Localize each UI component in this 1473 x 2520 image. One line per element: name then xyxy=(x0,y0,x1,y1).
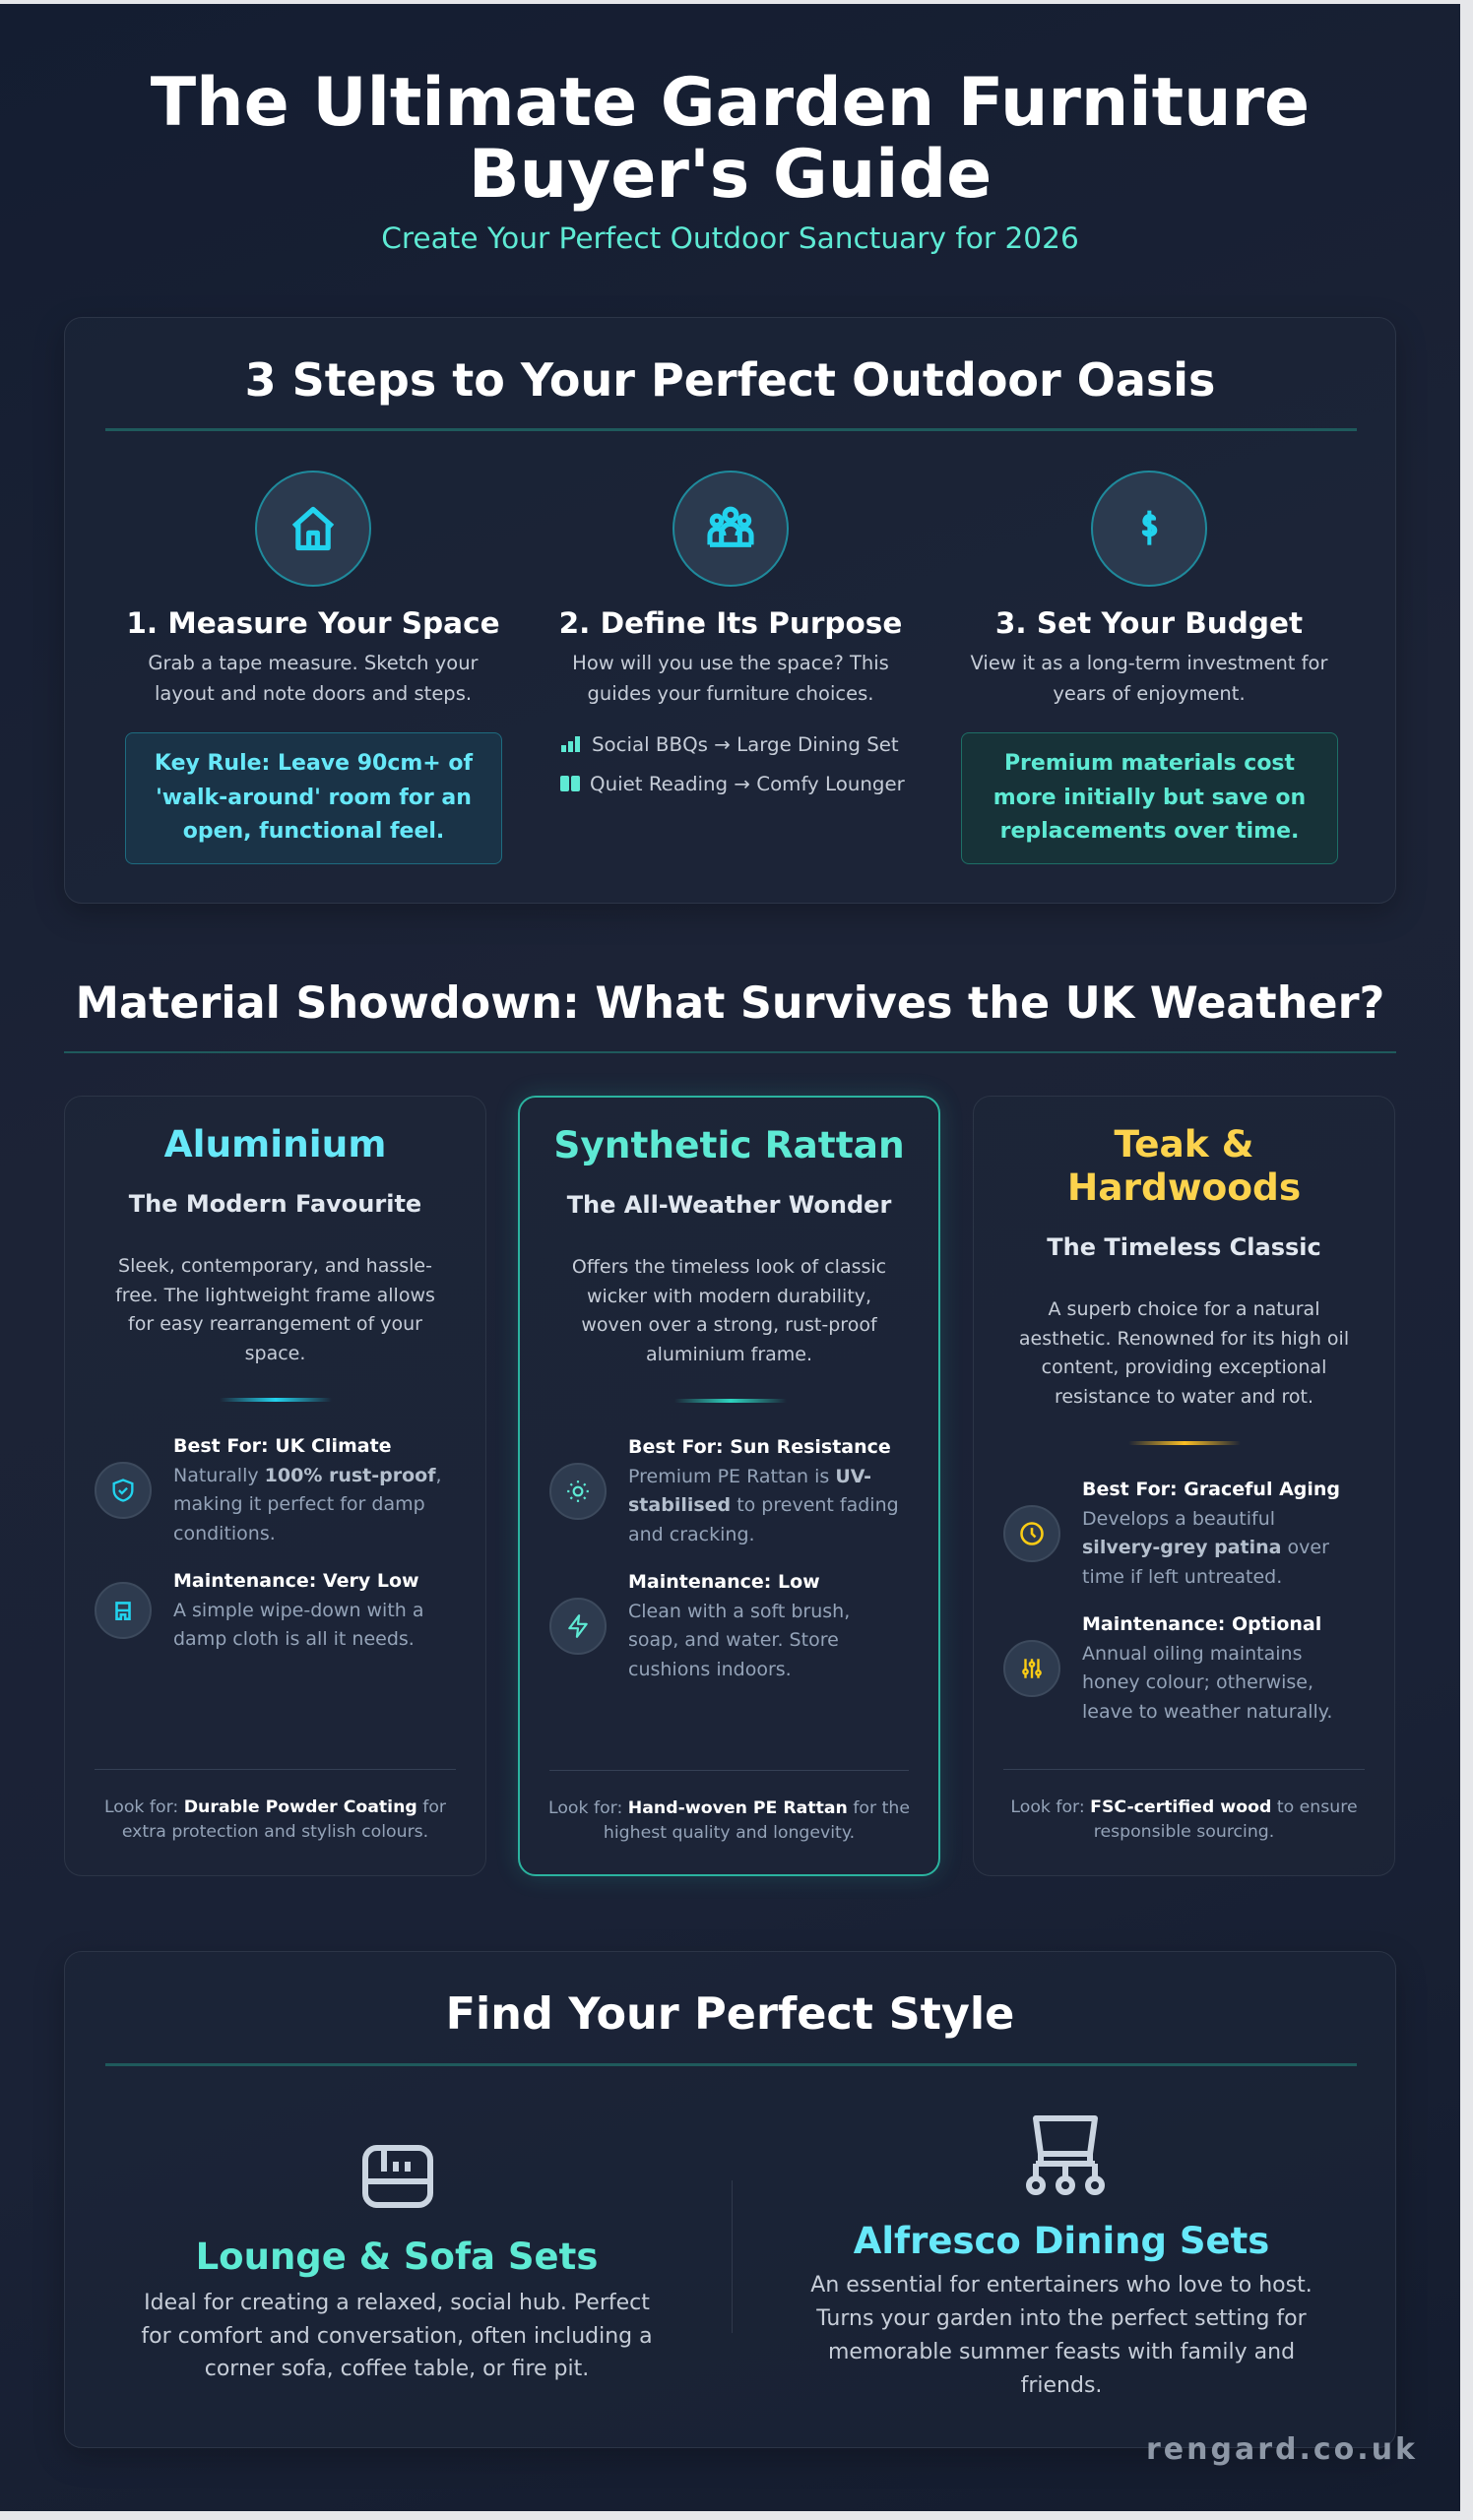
feature: best for xyxy=(549,1436,899,1545)
dining text: Alfresco Dining Sets xyxy=(854,2220,1269,2262)
step 1: layout and note doors and steps. xyxy=(155,682,472,705)
step 1: Grab a tape measure. Sketch your xyxy=(148,652,479,674)
feature: best for: Develops a beautiful xyxy=(1082,1508,1275,1530)
step 2: 2. Define Its Purpose xyxy=(559,606,902,640)
panel: synthetic rattan xyxy=(518,1096,940,1876)
purpose list: Quiet Reading → Comfy Lounger xyxy=(590,773,905,795)
icon: sofa xyxy=(362,2145,433,2208)
feature: best for: silvery-grey patina over time if left untreated. xyxy=(1082,1537,1329,1587)
watermark: rengard.co.uk xyxy=(1146,2432,1418,2467)
title: The Ultimate Garden Furniture xyxy=(151,64,1310,142)
panel: teak: A superb choice for a natural aesthetic. Renowned for its high oil content, providing exceptional resistance to water and rot. xyxy=(1019,1298,1349,1408)
lounge text: Ideal for creating a relaxed, social hub. Perfect xyxy=(144,2291,650,2315)
feature: maintenance xyxy=(549,1571,850,1679)
dining text: Turns your garden into the perfect setting for xyxy=(816,2306,1307,2331)
panel: aluminium: Sleek, contemporary, and hassle-free. The lightweight frame allows for easy rearrangement of your space. xyxy=(115,1255,435,1364)
panel: synthetic rattan: Offers the timeless look of classic wicker with modern durability, woven over a strong, rust-proof aluminium frame. xyxy=(572,1256,886,1364)
step 3: View it as a long-term investment for xyxy=(971,652,1327,674)
panel: aluminium: The Modern Favourite xyxy=(129,1190,421,1218)
dining text xyxy=(810,2220,1313,2398)
step 1: 1. Measure Your Space xyxy=(126,606,500,640)
feature: best for: Premium PE Rattan is UV-stabilised to prevent fading and cracking. xyxy=(628,1465,899,1545)
icon: money xyxy=(1091,471,1207,587)
dining text: friends. xyxy=(1021,2373,1102,2398)
step 3: years of enjoyment. xyxy=(1053,682,1246,705)
icon: house xyxy=(255,471,371,587)
heading: 3 steps: 3 Steps to Your Perfect Outdoor Oasis xyxy=(245,353,1215,407)
feature: maintenance: honey colour; otherwise, xyxy=(1082,1671,1313,1693)
title: Buyer's Guide xyxy=(469,136,992,214)
callout: premium: Premium materials cost more initially but save on replacements over time. xyxy=(993,751,1306,844)
step 2: guides your furniture choices. xyxy=(588,682,873,705)
purpose list: Social BBQs → Large Dining Set xyxy=(592,733,899,756)
feature: maintenance: Annual oiling maintains xyxy=(1082,1642,1302,1664)
feature: maintenance xyxy=(95,1570,424,1650)
lounge text xyxy=(141,2236,653,2381)
panel: teak: The Timeless Classic xyxy=(1047,1233,1321,1261)
dining text: memorable summer feasts with family and xyxy=(828,2340,1295,2364)
icon: dining xyxy=(1026,2115,1105,2195)
heading: material showdown: Material Showdown: What Survives the UK Weather? xyxy=(76,978,1384,1029)
divider vertical xyxy=(732,2180,733,2333)
step 3: 3. Set Your Budget xyxy=(995,606,1303,640)
panel: synthetic rattan: Synthetic Rattan xyxy=(553,1123,905,1166)
dining text: An essential for entertainers who love to host. xyxy=(810,2273,1313,2298)
step 3 xyxy=(971,606,1327,705)
panel: find your style xyxy=(64,1951,1396,2448)
feature: maintenance: Clean with a soft brush, xyxy=(628,1601,850,1622)
panel: teak: Teak & xyxy=(1114,1122,1254,1166)
subtitle: Create Your Perfect Outdoor Sanctuary for 2026 xyxy=(381,221,1079,255)
footer tip: Look for: Hand-woven PE Rattan for the highest quality and longevity. xyxy=(548,1798,910,1843)
step 2 xyxy=(559,606,902,705)
heading: find your style: Find Your Perfect Style xyxy=(446,1989,1014,2040)
title xyxy=(151,64,1310,214)
callout: premium xyxy=(961,732,1338,864)
feature: best for: Best For: UK Climate xyxy=(173,1435,392,1457)
lounge text: for comfort and conversation, often including a xyxy=(141,2323,653,2349)
feature: maintenance xyxy=(1003,1613,1332,1723)
lounge text: Lounge & Sofa Sets xyxy=(196,2236,598,2278)
panel: 3 steps xyxy=(64,317,1396,904)
callout: key rule: Key Rule: Leave 90cm+ of 'walk-around' room for an open, functional feel. xyxy=(155,751,473,844)
lounge text: corner sofa, coffee table, or fire pit. xyxy=(205,2357,589,2381)
feature: maintenance: A simple wipe-down with a damp cloth is all it needs. xyxy=(173,1599,424,1650)
panel: aluminium: Aluminium xyxy=(164,1122,386,1166)
feature: best for: Best For: Graceful Aging xyxy=(1082,1479,1340,1500)
feature: best for xyxy=(1003,1479,1340,1587)
footer tip: Look for: Durable Powder Coating for extra protection and stylish colours. xyxy=(104,1797,446,1842)
feature: maintenance: Maintenance: Low xyxy=(628,1571,820,1593)
footer tip: Look for: FSC-certified wood to ensure responsible sourcing. xyxy=(1010,1797,1358,1842)
feature: best for xyxy=(95,1435,442,1544)
purpose list xyxy=(560,733,905,795)
step 2: How will you use the space? This xyxy=(572,652,889,674)
feature: maintenance: Maintenance: Very Low xyxy=(173,1570,419,1592)
feature: maintenance: Maintenance: Optional xyxy=(1082,1613,1321,1635)
callout: key rule xyxy=(125,732,502,864)
panel: aluminium xyxy=(64,1096,486,1876)
feature: maintenance: leave to weather naturally. xyxy=(1082,1701,1332,1723)
panel: synthetic rattan: The All-Weather Wonder xyxy=(567,1191,891,1219)
feature: best for: Best For: Sun Resistance xyxy=(628,1436,891,1458)
step 1 xyxy=(126,606,500,705)
panel: teak: Hardwoods xyxy=(1067,1166,1301,1209)
icon: people xyxy=(672,471,789,587)
feature: maintenance: soap, and water. Store cushions indoors. xyxy=(628,1629,839,1679)
feature: best for: Naturally 100% rust-proof, making it perfect for damp conditions. xyxy=(173,1465,442,1544)
panel: teak xyxy=(973,1096,1395,1876)
